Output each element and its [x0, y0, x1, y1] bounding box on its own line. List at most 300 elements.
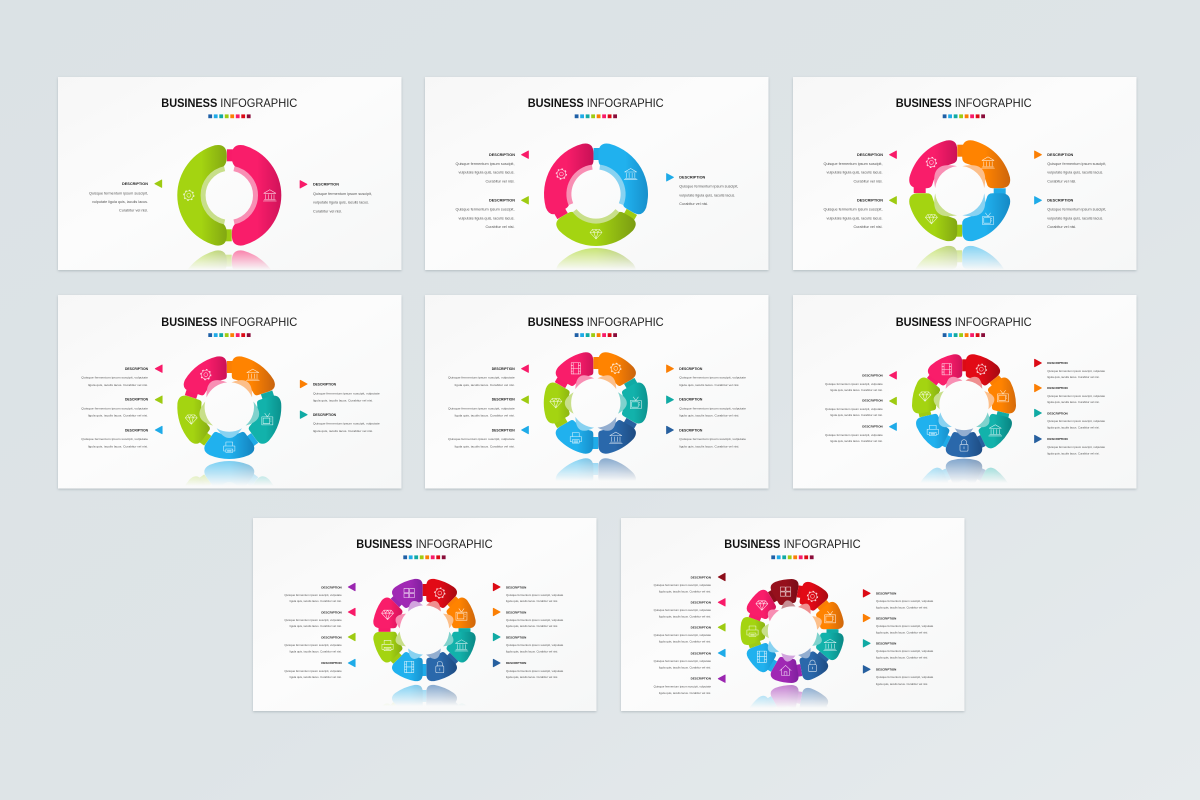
callout: right orange — [667, 365, 746, 387]
icon: bank — [989, 425, 1002, 436]
callout: left maroon: ligula quis, iaculis lacus. Curabitur vel nisi. — [659, 590, 711, 594]
panel card — [425, 295, 768, 488]
callout: right orange — [1035, 384, 1106, 404]
callout: left purple — [284, 583, 355, 603]
callout: right pink — [300, 181, 372, 213]
callout: left purple: ligula quis, iaculis lacus. Curabitur vel nisi. — [659, 691, 711, 695]
ring chart — [369, 575, 480, 685]
icon: bank — [624, 168, 637, 180]
icon: printer — [224, 442, 235, 452]
callout: left green: ligula quis, iaculis lacus. Curabitur vel nisi. — [659, 640, 711, 644]
panel: eight segments — [252, 518, 598, 713]
heading: INFOGRAPHIC — [220, 315, 298, 329]
heading: INFOGRAPHIC — [416, 537, 493, 551]
callout: left blue: DESCRIPTION — [125, 428, 149, 432]
heading: BUSINESS — [161, 315, 217, 329]
callout: right red — [493, 583, 564, 603]
panel: nine segments — [620, 518, 966, 713]
segment: teal — [242, 386, 288, 447]
callout: left green — [284, 633, 355, 654]
callout: left green — [89, 180, 162, 213]
callout: left blue: Quisque fermentum ipsum suscipit, vulputate — [448, 437, 515, 441]
segment: navy — [419, 644, 462, 684]
segment: orange — [218, 348, 280, 405]
segment: orange — [585, 345, 640, 394]
icon: bank — [609, 432, 622, 443]
icon: bank — [455, 640, 468, 651]
callout: right navy: ligula quis, iaculis lacus. Curabitur vel nisi. — [506, 675, 558, 679]
segment: navy — [946, 428, 986, 457]
panel: six segments — [424, 295, 770, 490]
callout: right orange: Quisque fermentum ipsum suscipit, vulputate — [876, 624, 934, 628]
callout: left green: Quisque fermentum ipsum suscipit, — [89, 191, 148, 195]
callout: right orange: DESCRIPTION — [679, 367, 703, 371]
callout: left pink: Quisque fermentum ipsum suscipit, vulputate — [448, 376, 515, 380]
callout: left green: DESCRIPTION — [122, 182, 148, 186]
callout: left green: Quisque fermentum ipsum suscipit, vulputate — [654, 633, 712, 637]
callout: left pink: ligula quis, iaculis lacus. Curabitur vel nisi. — [830, 388, 883, 392]
callout: left green: DESCRIPTION — [857, 198, 883, 202]
callout: right teal: Quisque fermentum ipsum suscipit, vulputate — [1047, 419, 1106, 423]
segment: green — [908, 376, 946, 421]
reflection — [751, 685, 828, 706]
panel: three segments — [424, 77, 770, 272]
callout: right orange — [1035, 151, 1106, 183]
callout: right teal: Quisque fermentum ipsum suscipit, vulputate — [313, 421, 380, 425]
heading: BUSINESS — [528, 315, 584, 329]
callout: right blue: Quisque fermentum ipsum suscipit, — [679, 185, 738, 189]
heading: INFOGRAPHIC — [587, 315, 664, 329]
callout: left pink: Curabitur vel nisi. — [486, 179, 514, 183]
segment: pink — [741, 587, 783, 629]
reflection — [384, 684, 464, 704]
callout: right navy: Quisque fermentum ipsum suscipit, vulputate — [679, 437, 746, 441]
callout: left blue: Quisque fermentum ipsum suscipit, vulputate — [81, 437, 148, 441]
callout: right teal: DESCRIPTION — [679, 398, 703, 402]
panel card — [793, 77, 1136, 270]
icon: film — [757, 651, 766, 662]
icon: house — [780, 665, 791, 675]
segment: pink — [922, 351, 971, 394]
panel card — [58, 77, 402, 270]
callout: right navy: Quisque fermentum ipsum suscipit, vulputate — [506, 669, 564, 673]
callout: right pink: DESCRIPTION — [313, 183, 339, 187]
icon: gear — [611, 363, 621, 373]
callout: right navy: DESCRIPTION — [876, 667, 896, 671]
panel card — [58, 295, 402, 488]
callout: right orange: vulputate ligula quis, iaculis lacus. — [1047, 171, 1103, 175]
icon: diamond — [185, 415, 197, 424]
callout: left pink — [81, 365, 162, 387]
callout: right teal: ligula quis, iaculis lacus. Curabitur vel nisi. — [313, 429, 373, 433]
callout: right orange: Quisque fermentum ipsum suscipit, vulputate — [1047, 394, 1106, 398]
callout: left green: Curabitur vel nisi. — [854, 225, 882, 229]
icon: tv — [262, 413, 273, 425]
callout: left blue: ligula quis, iaculis lacus. Curabitur vel nisi. — [830, 439, 883, 443]
segment: pink — [227, 145, 281, 246]
callout: right blue — [1035, 197, 1106, 229]
segment: purple — [387, 576, 430, 616]
callout: left green: Curabitur vel nisi. — [486, 225, 514, 229]
callout: right navy: ligula quis, iaculis lacus. Curabitur vel nisi. — [876, 682, 928, 686]
segment: maroon — [766, 577, 802, 611]
callout: left blue: Quisque fermentum ipsum suscipit, vulputate — [654, 659, 712, 663]
callout: right teal — [493, 633, 564, 654]
callout: left blue: ligula quis, iaculis lacus. Curabitur vel nisi. — [455, 444, 515, 448]
callout: right red: Quisque fermentum ipsum suscipit, vulputate — [876, 599, 934, 603]
callout: right pink: Curabitur vel nisi. — [313, 209, 342, 213]
callout: left purple: Quisque fermentum ipsum suscipit, vulputate — [284, 593, 342, 597]
callout: left pink: Quisque fermentum ipsum suscipit, vulputate — [654, 608, 712, 612]
callout: left green: Quisque fermentum ipsum suscipit, vulputate — [448, 406, 515, 410]
segment: green — [556, 209, 637, 246]
reflection — [189, 250, 270, 268]
icon: gear — [926, 157, 937, 168]
callout: right teal: DESCRIPTION — [506, 635, 526, 639]
icon: bank — [263, 190, 276, 201]
callout: right blue: DESCRIPTION — [679, 176, 706, 180]
icon: tv — [456, 609, 467, 620]
icon: film — [571, 363, 580, 374]
segment: green — [172, 390, 218, 451]
panel: two segments — [57, 77, 402, 272]
callout: left purple: DESCRIPTION — [691, 677, 711, 681]
callout: right orange: Quisque fermentum ipsum suscipit, vulputate — [313, 391, 380, 395]
callout: right navy: DESCRIPTION — [506, 661, 526, 665]
callout: left green: vulputate ligula quis, iaculis lacus. — [92, 200, 148, 204]
callout: right red: Quisque fermentum ipsum suscipit, vulputate — [1047, 369, 1106, 373]
callout: left pink — [284, 608, 355, 628]
callout: right teal: DESCRIPTION — [313, 413, 337, 417]
callout: left purple: ligula quis, iaculis lacus. Curabitur vel nisi. — [290, 599, 342, 603]
segment: green — [901, 182, 970, 252]
panel card — [253, 518, 596, 711]
callout: left pink — [825, 372, 896, 392]
segment: navy — [589, 410, 644, 458]
callout: left pink: DESCRIPTION — [492, 367, 515, 371]
callout: right teal — [667, 396, 746, 418]
callout: right orange: Curabitur vel nisi. — [1047, 179, 1076, 183]
callout: left pink: DESCRIPTION — [691, 600, 711, 604]
callout: left pink: Quisque fermentum ipsum suscipit, — [824, 162, 883, 166]
heading: BUSINESS — [161, 96, 217, 110]
segment: pink — [369, 595, 409, 639]
segment: green — [177, 145, 232, 246]
callout: right teal: Quisque fermentum ipsum suscipit, vulputate — [876, 649, 934, 653]
heading: BUSINESS — [356, 537, 412, 551]
colour swatches — [575, 114, 617, 118]
icon: gear — [807, 591, 818, 601]
callout: right teal — [300, 411, 380, 433]
callout: right teal: Quisque fermentum ipsum suscipit, vulputate — [506, 643, 564, 647]
callout: right teal — [1035, 409, 1106, 430]
callout: right red: DESCRIPTION — [1047, 361, 1068, 365]
segment: blue — [204, 428, 258, 459]
heading: BUSINESS — [724, 537, 780, 551]
segment: orange — [949, 130, 1018, 199]
heading: BUSINESS — [896, 96, 952, 110]
callout: left green — [81, 396, 162, 418]
panel: five segments — [57, 295, 402, 490]
callout: left green: DESCRIPTION — [862, 399, 883, 403]
ring chart — [908, 349, 1019, 457]
callout: left pink — [654, 599, 725, 618]
callout: left green: ligula quis, iaculis lacus. Curabitur vel nisi. — [290, 650, 342, 654]
icon: gear — [201, 370, 211, 380]
callout: right navy: Quisque fermentum ipsum suscipit, vulputate — [1047, 445, 1106, 449]
callout: left green — [654, 624, 725, 644]
callout: left purple — [654, 675, 725, 695]
reflection — [916, 246, 1003, 268]
callout: left pink — [456, 151, 528, 183]
heading: INFOGRAPHIC — [955, 96, 1032, 110]
callout: right navy: DESCRIPTION — [679, 428, 703, 432]
callout: left blue — [654, 649, 725, 670]
callout: left pink: Quisque fermentum ipsum suscipit, vulputate — [81, 376, 148, 380]
callout: left blue: DESCRIPTION — [321, 661, 342, 665]
callout: right orange: DESCRIPTION — [876, 616, 896, 620]
callout: left blue: ligula quis, iaculis lacus. Curabitur vel nisi. — [659, 666, 711, 670]
icon: bank — [246, 369, 259, 380]
icon: diamond — [756, 601, 768, 610]
callout: right orange: ligula quis, iaculis lacus. Curabitur vel nisi. — [679, 383, 739, 387]
ring chart — [530, 132, 661, 246]
colour swatches — [575, 333, 617, 337]
callout: left pink: DESCRIPTION — [857, 153, 883, 157]
callout: left green: DESCRIPTION — [492, 398, 515, 402]
callout: left pink: vulputate ligula quis, iaculis lacus. — [826, 171, 883, 175]
callout: right teal — [863, 640, 934, 660]
callout: left pink: ligula quis, iaculis lacus. Curabitur vel nisi. — [290, 624, 342, 628]
callout: right teal: DESCRIPTION — [876, 641, 896, 645]
callout: left green: vulputate ligula quis, iaculis lacus. — [826, 216, 883, 220]
segment: green — [741, 617, 769, 648]
callout: left blue — [284, 659, 355, 679]
callout: right red: DESCRIPTION — [876, 591, 896, 595]
callout: right blue: DESCRIPTION — [1047, 198, 1074, 202]
segment: teal — [618, 378, 648, 424]
callout: left green: DESCRIPTION — [489, 198, 515, 202]
heading: INFOGRAPHIC — [220, 96, 298, 110]
callout: right orange: DESCRIPTION — [1047, 153, 1074, 157]
segment: orange — [809, 597, 846, 636]
callout: right teal: Quisque fermentum ipsum suscipit, vulputate — [679, 406, 746, 410]
segment: green — [370, 624, 410, 668]
callout: left pink: ligula quis, iaculis lacus. Curabitur vel nisi. — [455, 383, 515, 387]
callout: right red: Quisque fermentum ipsum suscipit, vulputate — [506, 593, 564, 597]
reflection — [556, 248, 636, 268]
callout: right navy — [493, 659, 564, 679]
segment: red — [416, 575, 459, 615]
colour swatches — [403, 555, 446, 559]
callout: left blue: Quisque fermentum ipsum suscipit, vulputate — [284, 669, 342, 673]
callout: left blue — [825, 423, 896, 443]
callout: left purple: Quisque fermentum ipsum suscipit, vulputate — [654, 684, 712, 688]
segment: blue — [552, 412, 606, 461]
icon: diamond — [382, 610, 394, 620]
icon: windows — [780, 587, 791, 596]
icon: gear — [435, 588, 445, 598]
callout: left pink: DESCRIPTION — [489, 153, 515, 157]
icon: lock — [960, 440, 968, 451]
callout: right orange: DESCRIPTION — [313, 382, 337, 386]
icon: tv — [997, 390, 1008, 402]
segment: navy — [792, 643, 834, 683]
callout: right orange: ligula quis, iaculis lacus. Curabitur vel nisi. — [506, 624, 558, 628]
callout: right orange — [300, 380, 380, 403]
ring chart — [544, 345, 648, 461]
callout: left green: ligula quis, iaculis lacus. Curabitur vel nisi. — [455, 414, 515, 418]
segment: blue — [588, 132, 661, 221]
panel card — [793, 295, 1136, 488]
callout: left maroon: Quisque fermentum ipsum suscipit, vulputate — [654, 583, 712, 587]
ring chart — [177, 145, 281, 246]
segment: orange — [439, 592, 479, 636]
callout: right blue: vulputate ligula quis, iaculis lacus. — [679, 193, 735, 197]
ring chart — [899, 130, 1021, 252]
callout: right teal: ligula quis, iaculis lacus. Curabitur vel nisi. — [506, 650, 558, 654]
icon: tv — [630, 397, 641, 408]
callout: left green: Quisque fermentum ipsum suscipit, vulputate — [825, 407, 883, 411]
segment: pink — [899, 132, 968, 201]
callout: right orange: Quisque fermentum ipsum suscipit, vulputate — [506, 618, 564, 622]
icon: printer — [382, 640, 393, 651]
callout: left green: Quisque fermentum ipsum suscipit, vulputate — [284, 643, 342, 647]
callout: left pink: Quisque fermentum ipsum suscipit, vulputate — [825, 382, 883, 386]
callout: left green: DESCRIPTION — [125, 398, 149, 402]
icon: printer — [927, 425, 938, 436]
icon: diamond — [590, 230, 602, 239]
callout: right navy: ligula quis, iaculis lacus. Curabitur vel nisi. — [679, 444, 739, 448]
icon: film — [405, 661, 414, 673]
reflection — [556, 458, 636, 480]
callout: right orange: Quisque fermentum ipsum suscipit, vulputate — [679, 376, 746, 380]
heading: INFOGRAPHIC — [955, 315, 1032, 329]
callout: left pink — [448, 365, 528, 387]
callout: right orange: DESCRIPTION — [1047, 386, 1068, 390]
callout: left green: ligula quis, iaculis lacus. Curabitur vel nisi. — [88, 414, 148, 418]
panel card — [425, 77, 768, 270]
segment: pink — [530, 134, 603, 222]
icon: diamond — [925, 214, 937, 224]
callout: right orange — [493, 608, 564, 628]
callout: right blue: Quisque fermentum ipsum suscipit, — [1047, 208, 1106, 212]
segment: teal — [810, 623, 847, 662]
icon: windows — [404, 588, 414, 598]
callout: left blue: ligula quis, iaculis lacus. Curabitur vel nisi. — [88, 444, 148, 448]
callout: right navy — [1035, 435, 1106, 456]
panel card — [621, 518, 964, 711]
callout: left green: Curabitur vel nisi. — [119, 209, 148, 213]
colour swatches — [208, 333, 251, 337]
callout: right orange: DESCRIPTION — [506, 610, 526, 614]
callout: left green — [448, 396, 528, 418]
icon: bank — [981, 157, 994, 168]
callout: left green: Quisque fermentum ipsum suscipit, vulputate — [81, 406, 148, 410]
icon: gear — [184, 190, 194, 200]
callout: left blue: DESCRIPTION — [862, 425, 883, 429]
callout: left maroon — [654, 573, 725, 594]
icon: bank — [824, 639, 837, 650]
callout: right orange — [863, 614, 934, 634]
callout: right navy — [863, 666, 934, 686]
callout: left blue — [448, 426, 528, 448]
callout: right blue: vulputate ligula quis, iaculis lacus. — [1047, 216, 1103, 220]
segment: blue — [912, 405, 960, 455]
callout: left pink: ligula quis, iaculis lacus. Curabitur vel nisi. — [659, 614, 711, 618]
icon: diamond — [919, 392, 931, 401]
callout: right pink: vulputate ligula quis, iaculis lacus. — [313, 201, 369, 205]
callout: right orange: ligula quis, iaculis lacus. Curabitur vel nisi. — [876, 630, 928, 634]
callout: left pink: DESCRIPTION — [125, 367, 149, 371]
callout: right navy — [667, 426, 746, 448]
callout: right blue — [667, 174, 738, 206]
callout: right pink: Quisque fermentum ipsum suscipit, — [313, 192, 372, 196]
callout: right teal: ligula quis, iaculis lacus. Curabitur vel nisi. — [876, 656, 928, 660]
reflection — [186, 461, 272, 484]
callout: left purple: DESCRIPTION — [321, 585, 342, 589]
ring chart — [172, 348, 288, 459]
callout: right red: DESCRIPTION — [506, 585, 526, 589]
callout: right orange: Quisque fermentum ipsum suscipit, — [1047, 162, 1106, 166]
callout: right navy: Quisque fermentum ipsum suscipit, vulputate — [876, 675, 934, 679]
icon: lock — [436, 661, 444, 673]
icon: tv — [825, 611, 836, 623]
icon: printer — [570, 433, 581, 443]
icon: gear — [976, 364, 986, 374]
callout: right teal: DESCRIPTION — [1047, 411, 1068, 415]
callout: right red — [863, 590, 934, 610]
callout: left green: Quisque fermentum ipsum suscipit, — [824, 208, 883, 212]
callout: right blue: Curabitur vel nisi. — [1047, 225, 1076, 229]
heading: INFOGRAPHIC — [587, 96, 664, 110]
icon: diamond — [550, 398, 562, 408]
callout: left maroon: DESCRIPTION — [691, 575, 711, 579]
callout: right red: ligula quis, iaculis lacus. Curabitur vel nisi. — [1047, 375, 1100, 379]
callout: left pink: Quisque fermentum ipsum suscipit, vulputate — [284, 618, 342, 622]
callout: right orange: ligula quis, iaculis lacus. Curabitur vel nisi. — [313, 399, 373, 403]
segment: pink — [548, 348, 602, 396]
callout: left green — [825, 397, 896, 417]
heading: INFOGRAPHIC — [784, 537, 861, 551]
icon: film — [942, 364, 951, 375]
segment: red — [789, 577, 831, 618]
callout: left green: DESCRIPTION — [691, 625, 711, 629]
callout: right red — [1035, 359, 1106, 379]
icon: gear — [556, 169, 566, 179]
callout: left blue: DESCRIPTION — [492, 428, 515, 432]
colour swatches — [943, 333, 985, 337]
icon: printer — [747, 626, 758, 636]
callout: left pink: Quisque fermentum ipsum suscipit, — [456, 162, 515, 166]
callout: right orange: ligula quis, iaculis lacus. Curabitur vel nisi. — [1047, 400, 1100, 404]
callout: left pink — [824, 151, 896, 183]
segment: blue — [744, 635, 786, 678]
colour swatches — [943, 114, 985, 118]
callout: left pink: vulputate ligula quis, iaculis lacus. — [458, 171, 515, 175]
callout: right navy: DESCRIPTION — [1047, 437, 1068, 441]
callout: left green — [456, 197, 528, 229]
segment: blue — [390, 645, 433, 685]
callout: left green: ligula quis, iaculis lacus. Curabitur vel nisi. — [830, 413, 883, 417]
callout: right blue: Curabitur vel nisi. — [679, 202, 708, 206]
callout: left pink: DESCRIPTION — [862, 374, 883, 378]
panel: seven segments — [792, 295, 1138, 490]
ring chart — [741, 577, 847, 685]
callout: left pink: ligula quis, iaculis lacus. Curabitur vel nisi. — [88, 383, 148, 387]
icon: tv — [982, 213, 993, 224]
callout: left blue — [81, 426, 162, 448]
